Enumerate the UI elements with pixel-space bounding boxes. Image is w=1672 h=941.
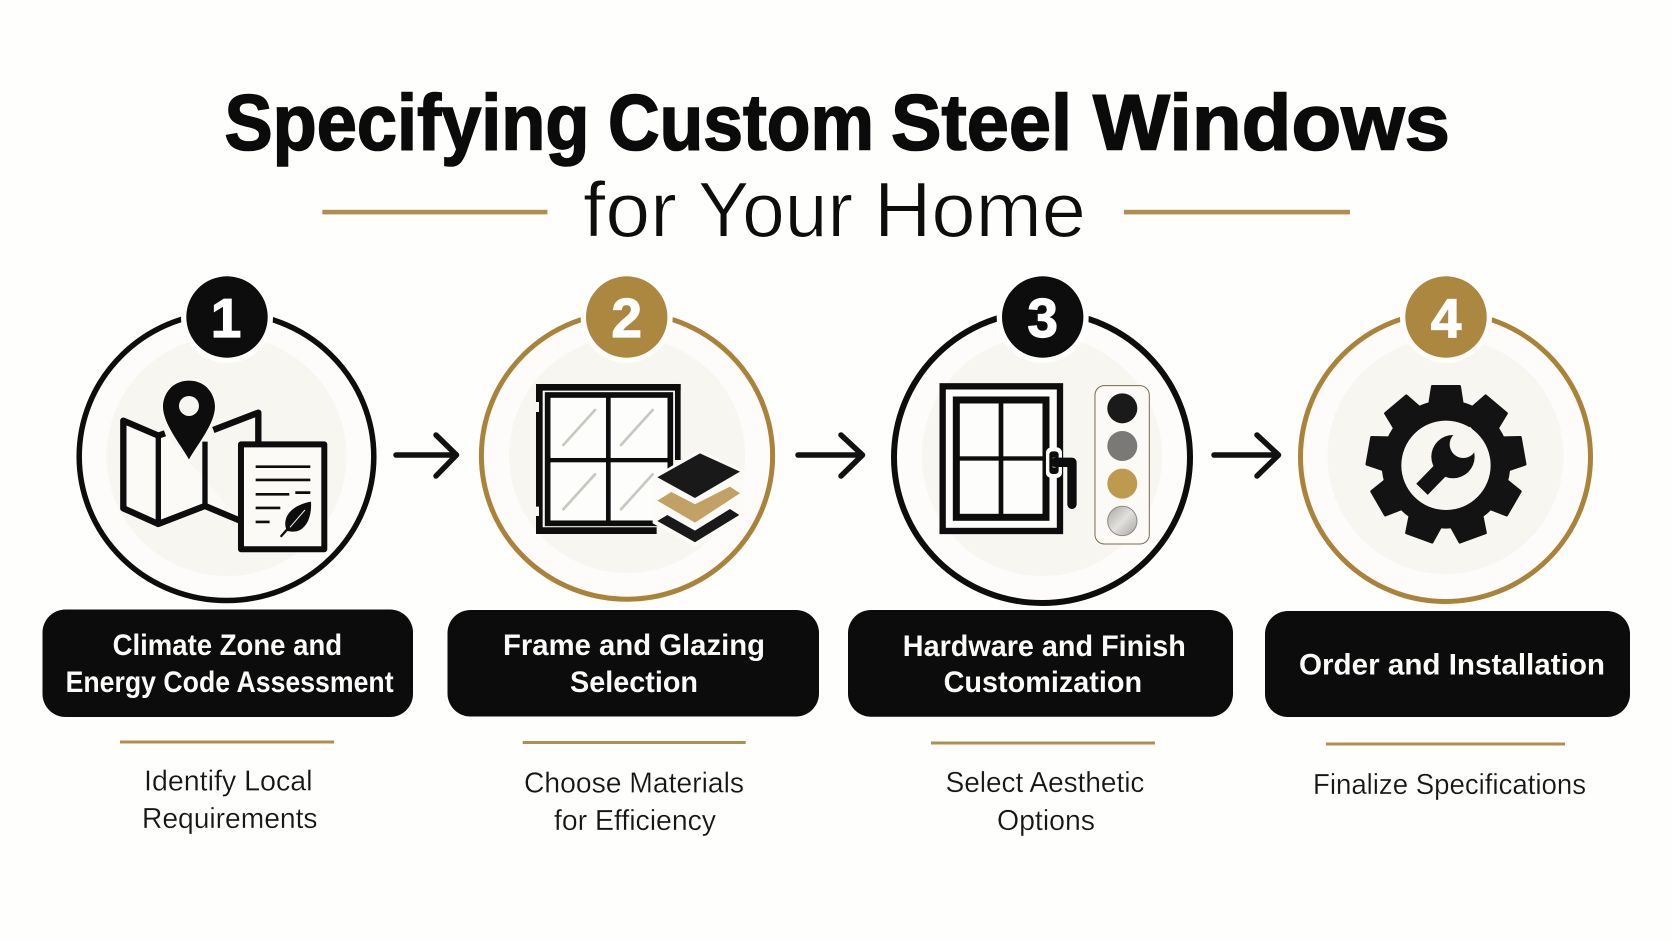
step 3 label pill: Hardware and Finish: [903, 630, 1186, 663]
step 1 description: [142, 766, 318, 835]
icon: window with handle and finish swatches: [943, 386, 1149, 544]
step 2 circle: [481, 312, 773, 599]
step 3 number badge: [997, 271, 1089, 363]
step 1 label pill: Climate Zone and: [113, 629, 342, 662]
step 3 description: Options: [997, 805, 1095, 837]
step 4 label pill: Order and Installation: [1299, 649, 1605, 682]
step 2 description: Choose Materials: [524, 767, 744, 799]
step 2 label pill: Selection: [570, 666, 698, 699]
step 2 number badge: 2: [611, 287, 642, 349]
title: Custom: [608, 78, 874, 166]
panel: step 4 order and installation: [1265, 271, 1630, 801]
arrow 3 to 4: [1214, 435, 1278, 476]
step 3 label pill: [848, 610, 1233, 717]
step 2 description: [524, 767, 744, 837]
title: Steel: [891, 78, 1072, 166]
step 1 label pill: [42, 610, 413, 717]
title: Home: [874, 166, 1086, 254]
step 1 label pill: Energy Code Assessment: [66, 666, 394, 699]
title: [224, 78, 1450, 254]
title: for: [583, 166, 677, 254]
arrow 2 to 3: [798, 435, 862, 476]
title: Windows: [1093, 78, 1450, 166]
step 3 circle: [894, 312, 1190, 603]
step 4 label pill: [1265, 611, 1630, 717]
step 2 label pill: [448, 610, 819, 716]
panel: step 1 climate zone: [42, 271, 413, 835]
step 3 description: [946, 767, 1144, 837]
step 4 number badge: [1400, 271, 1492, 363]
panel: step 2 frame and glazing: [448, 271, 819, 837]
step 1 circle: [79, 312, 374, 600]
step 2 label pill: Frame and Glazing: [503, 629, 765, 662]
step 1 description: Requirements: [142, 803, 318, 835]
step 3 label pill: Customization: [944, 666, 1142, 699]
panel: step 3 hardware and finish: [848, 271, 1233, 837]
icon: gear with wrench: [1366, 386, 1526, 544]
step 4 number badge: 4: [1431, 287, 1462, 349]
step 3 number badge: 3: [1027, 287, 1058, 349]
step 1 number badge: 1: [211, 287, 241, 349]
step 2 description: for Efficiency: [554, 805, 716, 837]
step 4 description: Finalize Specifications: [1313, 769, 1586, 801]
step 2 number badge: [581, 271, 673, 363]
step 4 circle: [1300, 312, 1590, 602]
step 3 description: Select Aesthetic: [946, 767, 1144, 799]
step 1 number badge: [181, 271, 273, 363]
step 1 description: Identify Local: [144, 766, 312, 798]
icon: window with layered glazing: [536, 384, 745, 547]
title: Specifying: [224, 78, 590, 166]
icon: map, pin and document with leaf: [123, 381, 324, 549]
arrow 1 to 2: [396, 435, 456, 476]
title: Your: [698, 166, 853, 254]
